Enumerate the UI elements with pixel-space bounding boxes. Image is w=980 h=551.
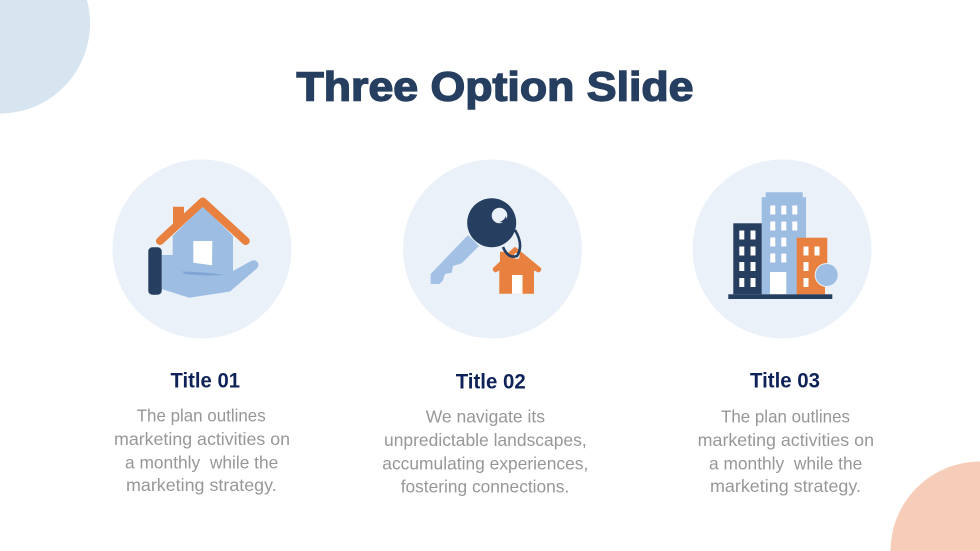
text block: option 1 description: [114, 406, 290, 495]
panel: option 1: [112, 160, 292, 495]
panel: option 3: [692, 160, 874, 496]
decorative corner circle: top left: [0, 0, 90, 114]
text block: option 1 description: marketing strategy.: [126, 475, 277, 495]
text block: option 3 description: marketing strategy.: [710, 476, 861, 496]
text block: option 2 description: [382, 407, 588, 496]
heading: Title 02: Title 02: [456, 370, 526, 393]
text block: option 3 description: marketing activities on: [698, 430, 874, 450]
icon: hand holding house: [112, 160, 292, 338]
text block: option 2 description: accumulating experiences,: [382, 453, 588, 473]
text block: option 1 description: The plan outlines: [137, 406, 266, 426]
text block: option 1 description: marketing activities on: [114, 429, 290, 449]
title: Three Option Slide: [296, 64, 694, 110]
text block: option 2 description: unpredictable landscapes,: [384, 430, 587, 450]
decorative corner circle: bottom right: [890, 462, 980, 551]
icon: city buildings: [692, 160, 872, 338]
panel: option 2: [382, 160, 588, 496]
text block: option 3 description: a monthly while the: [709, 453, 862, 473]
text block: option 3 description: [698, 407, 874, 496]
text block: option 2 description: fostering connections.: [401, 476, 569, 496]
icon: key with house keychain: [403, 160, 582, 338]
text block: option 3 description: The plan outlines: [721, 407, 850, 427]
heading: Title 01: Title 01: [170, 369, 240, 392]
text block: option 2 description: We navigate its: [426, 407, 545, 427]
heading: Title 03: Title 03: [750, 369, 820, 392]
text block: option 1 description: a monthly while the: [125, 452, 278, 472]
